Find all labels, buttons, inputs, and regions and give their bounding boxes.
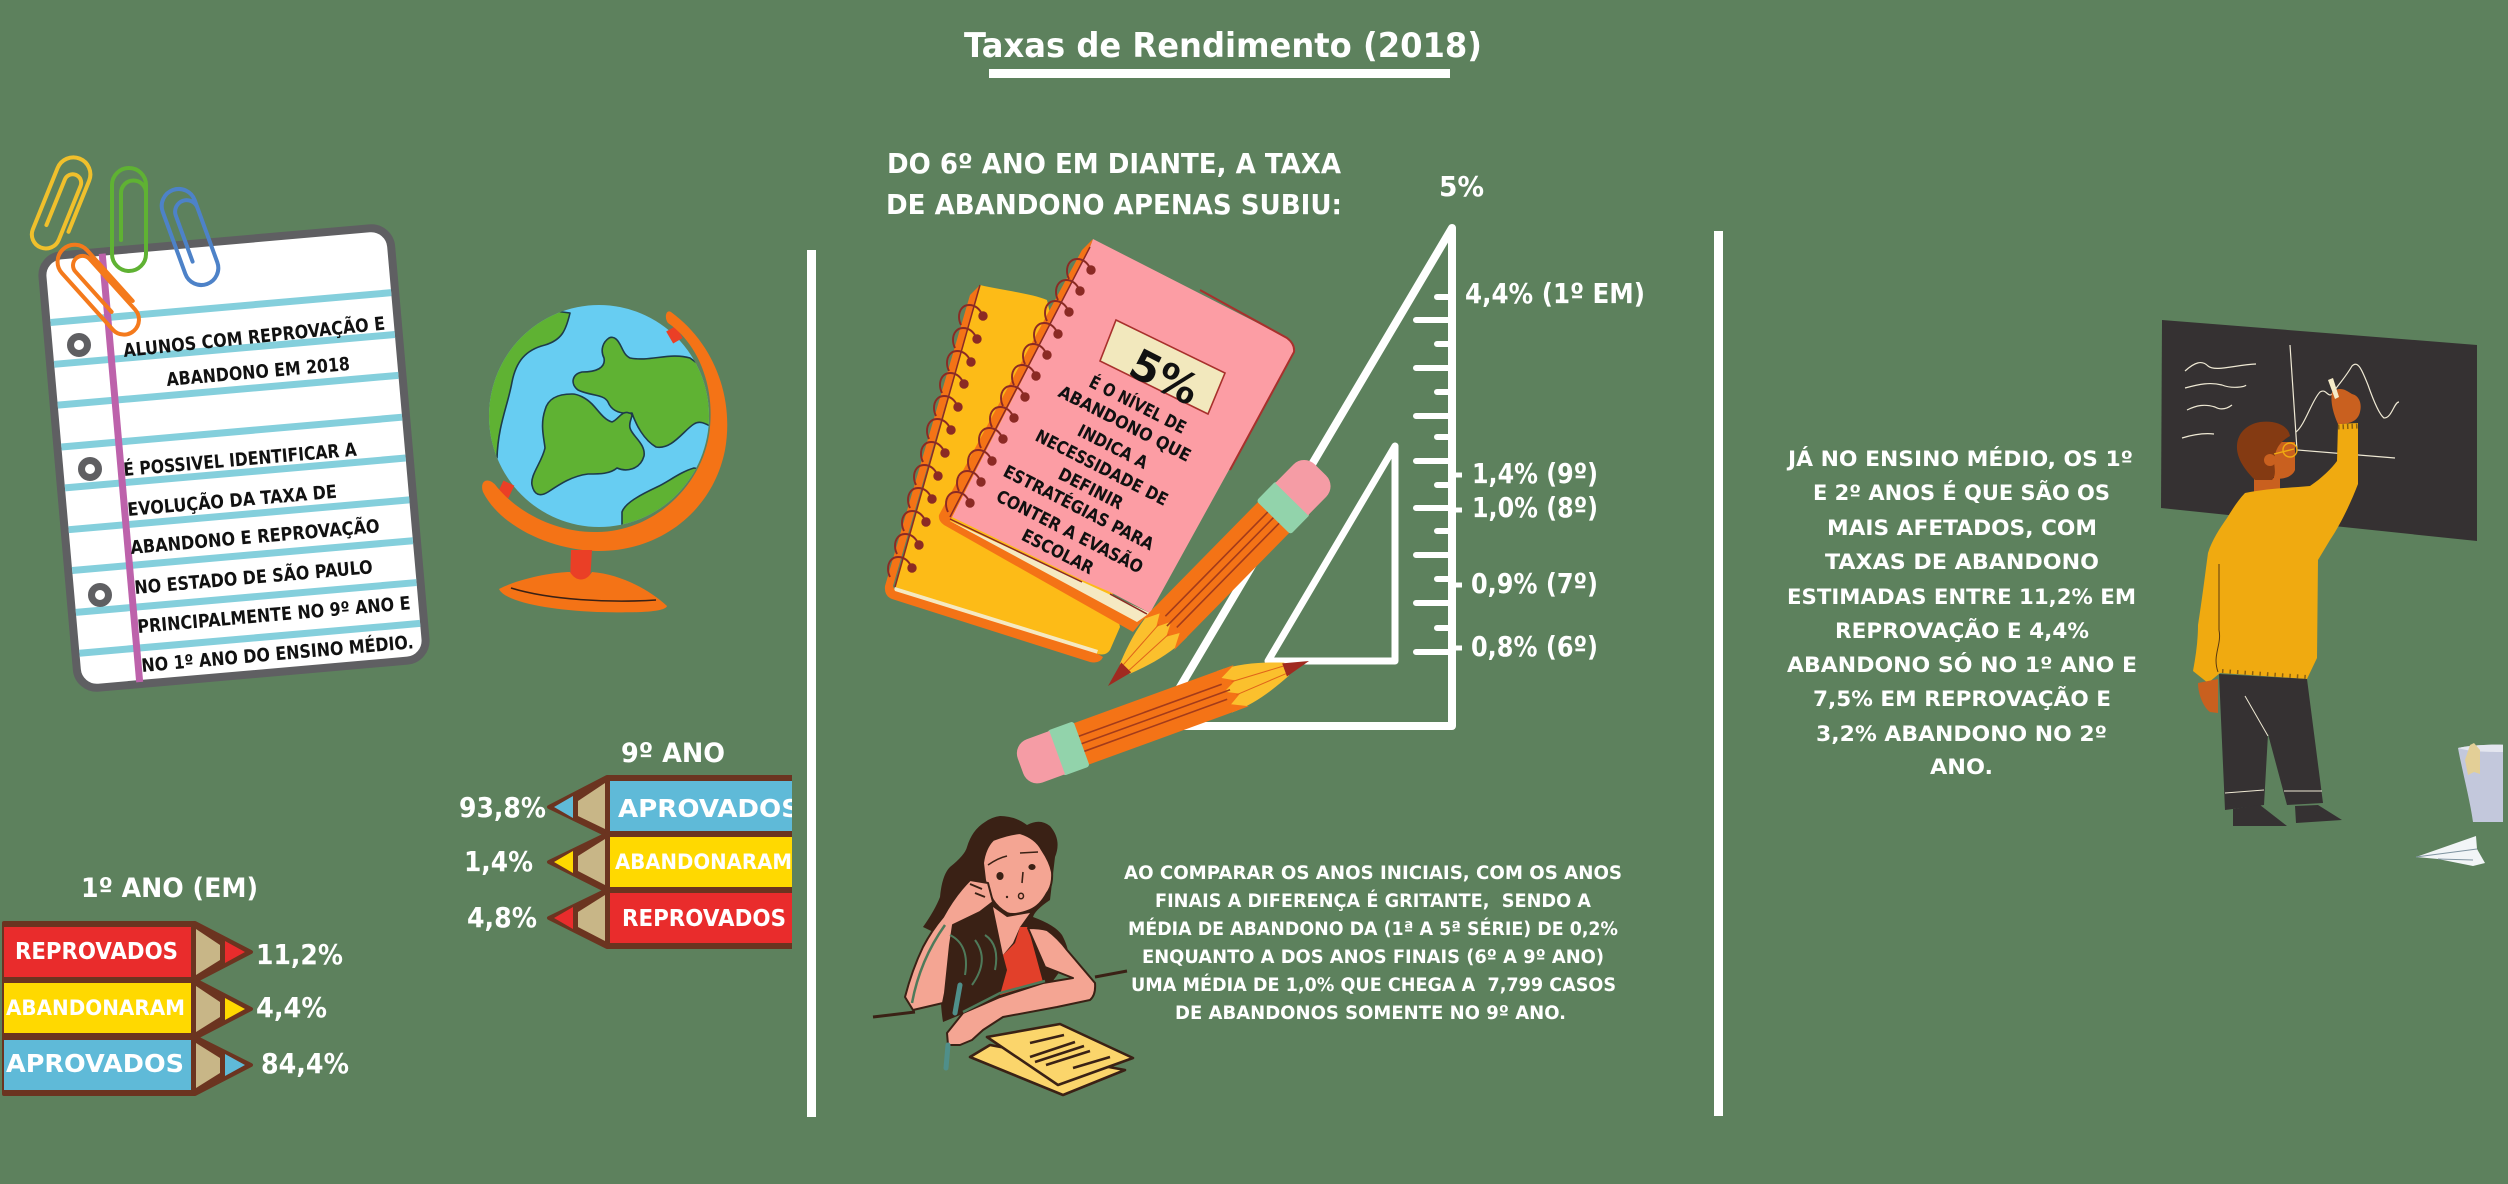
heading: 1º ano: 1º ANO (EM) xyxy=(81,873,258,904)
globe stand xyxy=(482,311,727,612)
text: ensino médio paragraph: ESTIMADAS ENTRE 11,2% EM xyxy=(1787,585,2136,609)
notebook text: ABANDONO QUE xyxy=(1055,382,1194,467)
shoes xyxy=(2233,805,2342,826)
panel: 9º ano pencils xyxy=(459,738,800,947)
panel: 1º ano pencils xyxy=(4,873,349,1094)
text: comparison paragraph: DE ABANDONOS SOMENTE NO 9º ANO. xyxy=(1175,1003,1566,1024)
finger lines xyxy=(970,884,985,897)
text: comparison paragraph: FINAIS A DIFERENÇA É GRITANTE, SENDO A xyxy=(1155,890,1592,912)
pencil: aprovados: APROVADOS xyxy=(6,1049,184,1078)
text: ensino médio paragraph xyxy=(1786,446,2137,779)
value: 11,2%: 11,2% xyxy=(256,938,343,971)
text: comparison paragraph: UMA MÉDIA DE 1,0% QUE CHEGA A 7,799 CASOS xyxy=(1131,974,1616,996)
notebook text: INDICA A xyxy=(1074,421,1151,474)
pencil in hand xyxy=(946,985,960,1068)
value: 4,4%: 4,4% xyxy=(256,991,327,1024)
blackboard xyxy=(2161,320,2477,541)
pencil: reprovados xyxy=(549,890,800,947)
hair shadow and strands xyxy=(950,935,996,985)
panel: notebook paper note xyxy=(28,152,427,689)
title: Taxas de Rendimento (2018) xyxy=(964,26,1482,66)
near arm xyxy=(905,880,993,1010)
heading: abandono subiu: DE ABANDONO APENAS SUBIU: xyxy=(886,189,1342,221)
note text: É POSSIVEL IDENTIFICAR A xyxy=(123,439,358,481)
chart: triangle ruler scale xyxy=(1157,170,1645,726)
pencil: aprovados xyxy=(549,777,800,835)
label: 1,4%: 1,4% (9º) xyxy=(1472,457,1598,490)
value: 93,8%: 93,8% xyxy=(459,791,546,824)
text: ensino médio paragraph: 7,5% EM REPROVAÇÃO E xyxy=(1813,686,2111,711)
table edge xyxy=(873,971,1127,1017)
note text: NO 1º ANO DO ENSINO MÉDIO. xyxy=(141,631,414,677)
icon: pencil lower xyxy=(1012,638,1317,789)
icon: paper bin xyxy=(2458,743,2508,822)
notebook text: É O NÍVEL DE xyxy=(1086,371,1190,439)
icon: globe xyxy=(470,300,727,612)
pencil: reprovados: REPROVADOS xyxy=(15,939,178,965)
text: comparison paragraph: MÉDIA DE ABANDONO DA (1ª A 5ª SÉRIE) DE 0,2% xyxy=(1128,918,1618,940)
text: comparison paragraph xyxy=(1124,863,1622,1024)
far arm xyxy=(947,928,1095,1045)
neck xyxy=(993,907,1030,955)
sweater xyxy=(2193,423,2358,683)
text: ensino médio paragraph: ABANDONO SÓ NO 1º ANO E xyxy=(1787,652,2137,677)
paper clips xyxy=(28,152,223,341)
top xyxy=(1000,927,1043,995)
notebook text: DEFINIR xyxy=(1055,465,1126,515)
face xyxy=(983,833,1052,914)
label box: 5%: 5% xyxy=(1122,339,1207,415)
binder holes xyxy=(70,336,108,604)
label: 0,9%: 0,9% (7º) xyxy=(1471,567,1598,600)
hair xyxy=(923,816,1068,1022)
text: comparison paragraph: AO COMPARAR OS ANOS INICIAIS, COM OS ANOS xyxy=(1124,863,1622,884)
text: ensino médio paragraph: JÁ NO ENSINO MÉDIO, OS 1º xyxy=(1786,446,2133,471)
notebook text: NECESSIDADE DE xyxy=(1032,426,1171,511)
hair and head xyxy=(2254,478,2280,492)
label: 4,4%: 4,4% (1º EM) xyxy=(1465,277,1645,310)
text: ensino médio paragraph: MAIS AFETADOS, COM xyxy=(1827,516,2097,540)
label: 1,0%: 1,0% (8º) xyxy=(1472,491,1598,524)
raised hand xyxy=(2331,389,2361,424)
pencil: reprovados: REPROVADOS xyxy=(622,906,786,932)
label box: 5% xyxy=(1100,320,1225,415)
icon: paper plane xyxy=(2416,836,2485,866)
icon: yellow notebook xyxy=(885,285,1120,662)
icon: pencil upper xyxy=(1091,453,1337,703)
value: 1,4%: 1,4% xyxy=(464,845,533,878)
heading: abandono subiu: DO 6º ANO EM DIANTE, A TAXA xyxy=(887,148,1342,180)
value: 4,8%: 4,8% xyxy=(467,901,537,934)
notebook text: CONTER A EVASÃO xyxy=(993,484,1147,578)
pencil: aprovados: APROVADOS xyxy=(618,794,800,823)
papers xyxy=(970,1024,1133,1095)
note text: PRINCIPALMENTE NO 9º ANO E xyxy=(137,593,411,638)
text: ensino médio paragraph: REPROVAÇÃO E 4,4% xyxy=(1835,618,2089,643)
notebook text: ESTRATÉGIAS PARA xyxy=(1000,460,1158,555)
ruler outline xyxy=(1157,228,1452,726)
text: ensino médio paragraph: ANO. xyxy=(1930,755,1993,779)
pencil: abandonaram xyxy=(549,834,800,891)
heading: abandono subiu xyxy=(886,148,1342,221)
pencil: abandonaram: ABANDONARAM xyxy=(615,850,792,874)
pencil: abandonaram xyxy=(4,980,251,1038)
label: 0,8%: 0,8% (6º) xyxy=(1471,630,1598,663)
note text: EVOLUÇÃO DA TAXA DE xyxy=(126,480,338,521)
pencil: abandonaram: ABANDONARAM xyxy=(6,996,185,1020)
illustration: studying girl xyxy=(873,816,1133,1095)
illustration: teacher at blackboard xyxy=(2161,320,2477,826)
note text xyxy=(122,312,414,677)
label: 5%: 5% xyxy=(1439,170,1484,203)
note text: ABANDONO EM 2018 xyxy=(166,354,351,391)
trousers xyxy=(2219,674,2323,810)
text: comparison paragraph: ENQUANTO A DOS ANOS FINAIS (6º A 9º ANO) xyxy=(1142,947,1604,968)
text: ensino médio paragraph: 3,2% ABANDONO NO 2º xyxy=(1816,722,2107,746)
text: ensino médio paragraph: E 2º ANOS É QUE SÃO OS xyxy=(1813,480,2110,505)
note text: ABANDONO E REPROVAÇÃO xyxy=(129,514,380,559)
value: 84,4%: 84,4% xyxy=(261,1047,349,1080)
pencil: reprovados xyxy=(4,923,251,981)
divider left xyxy=(807,250,816,1117)
notebook text: ESCOLAR xyxy=(1018,526,1097,579)
note text: NO ESTADO DE SÃO PAULO xyxy=(133,555,374,599)
divider right xyxy=(1714,231,1723,1116)
text: ensino médio paragraph: TAXAS DE ABANDONO xyxy=(1825,550,2099,574)
paper sheet xyxy=(41,227,427,689)
note text: ALUNOS COM REPROVAÇÃO E xyxy=(122,312,386,362)
pencil: aprovados xyxy=(4,1037,251,1094)
icon: pink notebook xyxy=(939,239,1294,632)
lower hand xyxy=(2198,679,2218,713)
facial features xyxy=(988,852,1038,899)
ruler ticks xyxy=(1416,297,1452,652)
heading: 9º ano: 9º ANO xyxy=(621,738,725,769)
notebook text xyxy=(993,371,1194,579)
